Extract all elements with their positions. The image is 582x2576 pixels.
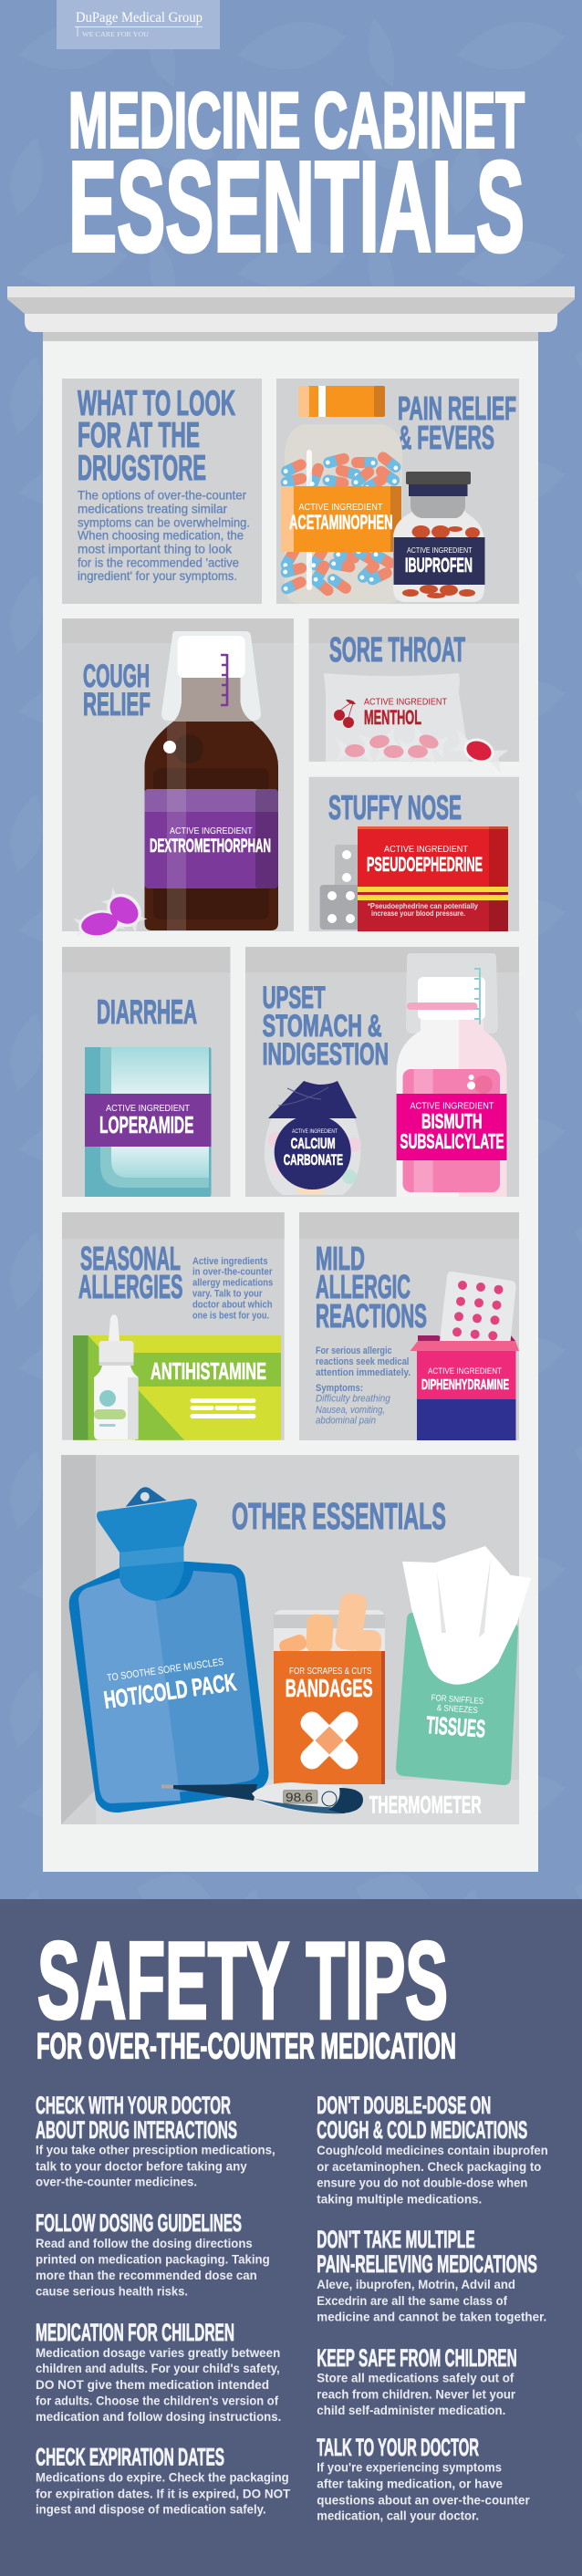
heading: mild allergic reactions: MILD — [316, 1240, 365, 1277]
tip: talk to your doctor: after taking medication, or have — [317, 2477, 503, 2491]
tip: medication for children: MEDICATION FOR CHILDREN — [36, 2319, 234, 2346]
icon: thermometer: 98.6 — [286, 1790, 313, 1804]
tip: don't double-dose: taking multiple medications. — [317, 2191, 482, 2206]
tip: medication for children: medication and follow dosing instructions. — [36, 2409, 281, 2424]
tip: check expiration dates: CHECK EXPIRATION DATES — [36, 2444, 224, 2471]
icon: calcium carbonate bottle: CARBONATE — [284, 1151, 343, 1169]
panel: diarrhea — [62, 947, 230, 1197]
icon: tissue box: FOR SNIFFLES — [431, 1693, 483, 1707]
tip: medication for children: for adults. Choose the children's version of — [36, 2394, 278, 2408]
tip: check with your doctor: If you take other presciption medications, — [36, 2143, 275, 2157]
tip: check expiration dates: for expiration dates. If it is expired, DO NOT — [36, 2486, 291, 2500]
heading: upset stomach — [263, 981, 389, 1072]
icon: hot water bottle — [69, 1487, 269, 1813]
panel: seasonal allergies — [62, 1212, 285, 1440]
panel: stuffy nose — [309, 777, 519, 931]
icon: hot water bottle: TO SOOTHE SORE MUSCLES — [107, 1657, 224, 1684]
tip: medication for children: Medication dosage varies greatly between — [36, 2345, 280, 2360]
tip: medication for children — [36, 2319, 281, 2424]
icon: diphenhydramine box and blister — [411, 1272, 519, 1440]
icon: blister packs — [320, 845, 362, 930]
text block: allergy advice: Active ingredients — [192, 1256, 268, 1267]
icon: diphenhydramine box and blister: ACTIVE INGREDIENT — [428, 1366, 502, 1376]
heading: mild allergic reactions: REACTIONS — [316, 1297, 427, 1335]
icon: loperamide box: LOPERAMIDE — [99, 1111, 193, 1138]
tip: follow dosing guidelines: Read and follow the dosing directions — [36, 2236, 253, 2250]
icon: loperamide box — [85, 1047, 212, 1197]
heading: stuffy nose: STUFFY NOSE — [328, 789, 462, 826]
icon: dextromethorphan bottle — [144, 631, 278, 930]
tip: don't take multiple: Excedrin are all the same class of — [317, 2293, 507, 2308]
panel: upset stomach and indigestion — [245, 947, 519, 1197]
icon: hot water bottle: HOT/COLD PACK — [102, 1668, 238, 1714]
tip: talk to your doctor: medication, call your doctor. — [317, 2508, 479, 2522]
heading: cough relief — [83, 659, 151, 722]
icon: dextromethorphan bottle: ACTIVE INGREDIENT — [170, 826, 253, 836]
text block: drugstore advice: The options of over-the-counter — [78, 488, 246, 503]
heading: safety tips — [36, 1919, 456, 2067]
text block: symptoms: Symptoms: — [316, 1383, 363, 1394]
heading: cough relief: RELIEF — [83, 687, 151, 722]
tip: keep safe from children: Store all medications safely out of — [317, 2370, 514, 2384]
icon: ibuprofen bottle: IBUPROFEN — [405, 554, 473, 576]
icon: bismuth subsalicylate bottle: ACTIVE INGREDIENT — [411, 1102, 494, 1112]
label: thermometer: THERMOMETER — [369, 1792, 482, 1819]
icon: bandages box: BANDAGES — [286, 1674, 373, 1702]
heading: what to look for — [78, 384, 235, 488]
icon: pseudoephedrine box: *Pseudoephedrine can potentially — [368, 902, 479, 910]
tip: don't double-dose: Cough/cold medicines contain ibuprofen — [317, 2143, 548, 2157]
logo: DuPage Medical Group — [57, 0, 220, 49]
icon: purple lozenges — [73, 887, 149, 941]
heading: seasonal allergies: SEASONAL — [80, 1240, 181, 1277]
text block: symptoms: reactions seek medical — [316, 1356, 409, 1367]
panel: other essentials — [61, 1455, 531, 1824]
heading: diarrhea: DIARRHEA — [97, 993, 197, 1031]
icon: tissue box — [396, 1546, 531, 1785]
text block: symptoms: Nausea, vomiting, — [316, 1405, 385, 1416]
tip: keep safe from children: reach from children. Never let your — [317, 2386, 516, 2401]
tip: follow dosing guidelines: more than the recommended dose can — [36, 2268, 257, 2282]
icon: bismuth subsalicylate bottle: BISMUTH — [421, 1109, 483, 1133]
tip: check with your doctor — [36, 2092, 275, 2189]
text block: drugstore advice: When choosing medication, the — [78, 528, 244, 543]
icon: calcium carbonate bottle — [265, 1081, 361, 1195]
text block: drugstore advice: ingredient' for your symptoms. — [78, 568, 237, 583]
icon: pseudoephedrine box — [358, 826, 508, 931]
tip: follow dosing guidelines — [36, 2209, 270, 2299]
heading: what to look for: WHAT TO LOOK — [78, 384, 235, 423]
panel: pain relief and fevers — [276, 379, 519, 604]
tip: follow dosing guidelines: FOLLOW DOSING GUIDELINES — [36, 2209, 242, 2237]
text block: allergy advice: doctor about which — [192, 1299, 273, 1310]
tip: medication for children: DO NOT give them medication intended — [36, 2377, 269, 2392]
icon: loperamide box: ACTIVE INGREDIENT — [106, 1104, 190, 1114]
icon: calcium carbonate bottle: ACTIVE INGREDIENT — [292, 1129, 338, 1135]
tip: check expiration dates: Medications do expire. Check the packaging — [36, 2470, 289, 2485]
icon: antihistamine box — [73, 1335, 281, 1440]
tip: talk to your doctor — [317, 2434, 530, 2522]
icon: pseudoephedrine box: increase your blood pressure. — [371, 909, 465, 918]
text block: allergy advice: in over-the-counter — [192, 1266, 273, 1277]
icon: thermometer — [161, 1782, 363, 1813]
tip: check with your doctor: CHECK WITH YOUR DOCTOR — [36, 2092, 231, 2119]
heading: what to look for: FOR AT THE — [78, 416, 200, 455]
heading: what to look for: DRUGSTORE — [78, 449, 206, 488]
text block: drugstore advice: symptoms can be overwhelming. — [78, 514, 250, 529]
heading: upset stomach: STOMACH & — [263, 1009, 382, 1044]
icon: acetaminophen bottle — [279, 386, 403, 604]
icon: antihistamine box: ANTIHISTAMINE — [151, 1357, 266, 1385]
heading: mild allergic reactions — [316, 1240, 427, 1335]
tip: don't double-dose: ensure you do not double-dose when — [317, 2175, 527, 2189]
title — [68, 77, 525, 278]
icon: menthol lozenge bag: ACTIVE INGREDIENT — [364, 698, 447, 708]
icon: dextromethorphan bottle: DEXTROMETHORPHAN — [150, 836, 271, 857]
tip: check expiration dates — [36, 2444, 291, 2517]
tip: medication for children: children and adults. For your child's safety, — [36, 2361, 280, 2375]
icon: diphenhydramine box and blister: DIPHENHYDRAMINE — [421, 1377, 509, 1393]
panel: mild allergic reactions — [299, 1212, 519, 1440]
icon: bandages box: FOR SCRAPES & CUTS — [289, 1667, 372, 1677]
tip: don't take multiple — [317, 2226, 546, 2323]
icon: acetaminophen bottle: ACTIVE INGREDIENT — [299, 503, 383, 513]
icon: ibuprofen bottle: ACTIVE INGREDIENT — [407, 545, 473, 555]
icon: acetaminophen bottle: ACETAMINOPHEN — [289, 511, 392, 534]
tip: follow dosing guidelines: printed on medication packaging. Taking — [36, 2252, 270, 2267]
tip: check with your doctor: over-the-counter medicines. — [36, 2175, 197, 2189]
heading: upset stomach: INDIGESTION — [263, 1037, 389, 1072]
tip: follow dosing guidelines: cause serious health risks. — [36, 2284, 188, 2299]
safety tips section — [0, 1899, 582, 2576]
icon: tissue box: & SNEEZES — [436, 1703, 478, 1716]
tip: check expiration dates: ingest and dispose of medication safely. — [36, 2502, 266, 2517]
icon: pseudoephedrine box: PSEUDOEPHEDRINE — [367, 853, 483, 876]
icon: bandages box — [274, 1592, 385, 1784]
heading: seasonal allergies — [78, 1240, 182, 1305]
icon: menthol lozenge bag — [324, 673, 509, 773]
panel: cough relief — [62, 618, 294, 941]
heading: sore throat: SORE THROAT — [329, 631, 465, 670]
tip: check with your doctor: ABOUT DRUG INTERACTIONS — [36, 2116, 237, 2144]
logo: DuPage Medical Group: WE CARE FOR YOU — [82, 31, 149, 38]
heading: pain relief — [398, 390, 516, 456]
text block: symptoms: abdominal pain — [316, 1416, 376, 1427]
text block: symptoms: attention immediately. — [316, 1367, 411, 1378]
text block: symptoms — [316, 1345, 411, 1427]
icon: bismuth subsalicylate bottle: SUBSALICYLATE — [400, 1129, 504, 1153]
text block: symptoms: Difficulty breathing — [316, 1394, 391, 1405]
text block: drugstore advice: for is the recommended 'active — [78, 556, 239, 570]
text block: allergy advice — [192, 1256, 273, 1321]
heading: pain relief: & FEVERS — [398, 419, 494, 456]
logo: DuPage Medical Group: DuPage Medical Group — [76, 10, 203, 26]
heading: cough relief: COUGH — [83, 659, 150, 694]
text block: drugstore advice: most important thing to look — [78, 542, 233, 556]
text block: drugstore advice: medications treating similar — [78, 501, 227, 515]
heading: seasonal allergies: ALLERGIES — [78, 1268, 182, 1305]
icon: calcium carbonate bottle: CALCIUM — [291, 1135, 336, 1152]
text block: allergy advice: one is best for you. — [192, 1310, 269, 1321]
heading: mild allergic reactions: ALLERGIC — [316, 1268, 411, 1305]
panel: sore throat — [309, 618, 519, 773]
tip: keep safe from children — [317, 2344, 517, 2417]
heading: upset stomach: UPSET — [263, 981, 326, 1015]
text block: allergy advice: allergy medications — [192, 1277, 273, 1288]
text block: symptoms: For serious allergic — [316, 1345, 392, 1356]
panel: what to look for at the drugstore — [62, 379, 262, 604]
tip: keep safe from children: child self-administer medication. — [317, 2403, 505, 2417]
icon: pseudoephedrine box: ACTIVE INGREDIENT — [384, 845, 468, 855]
tip: talk to your doctor: If you're experiencing symptoms — [317, 2460, 502, 2475]
icon: ibuprofen bottle — [393, 472, 485, 602]
tip: check with your doctor: talk to your doctor before taking any — [36, 2158, 247, 2173]
text block: drugstore advice — [78, 488, 250, 583]
tip: don't take multiple: medicine and cannot be taken together. — [317, 2309, 546, 2323]
text block: allergy advice: vary. Talk to your — [192, 1288, 263, 1299]
tip: don't double-dose: or acetaminophen. Check packaging to — [317, 2159, 541, 2174]
cabinet frame — [7, 286, 575, 1872]
icon: tissue box: TISSUES — [425, 1711, 486, 1743]
tip: don't double-dose — [317, 2092, 548, 2206]
icon: menthol lozenge bag: MENTHOL — [364, 706, 421, 729]
tip: don't take multiple: Aleve, ibuprofen, Motrin, Advil and — [317, 2277, 515, 2291]
icon: bismuth subsalicylate bottle — [397, 953, 507, 1197]
icon: nasal spray bottle — [94, 1314, 139, 1440]
tip: talk to your doctor: questions about an over-the-counter — [317, 2493, 530, 2508]
